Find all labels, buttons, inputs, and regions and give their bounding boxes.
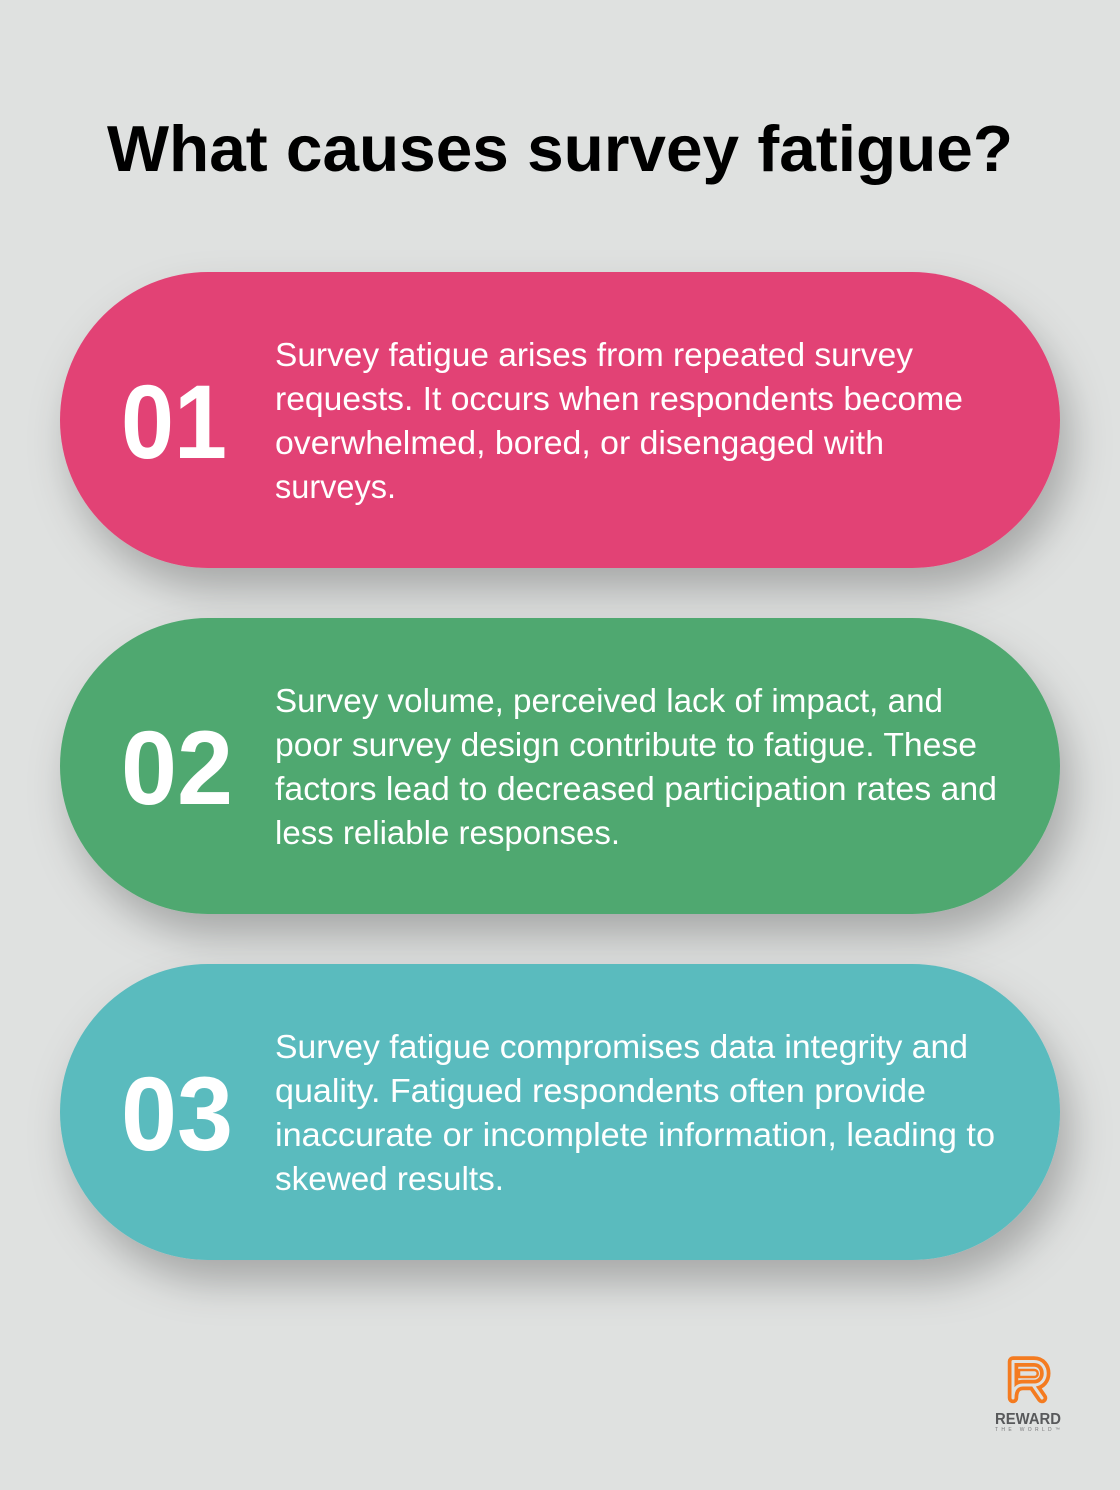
panel: card 03	[60, 964, 1060, 1260]
card 03 text: Survey fatigue compromises data integrity and	[275, 1028, 968, 1065]
card 03 text: inaccurate or incomplete information, leading to	[275, 1116, 995, 1153]
card 03 background	[60, 964, 1060, 1260]
card 03 text: quality. Fatigued respondents often provide	[275, 1072, 926, 1109]
card 02 number: 02	[121, 710, 233, 827]
card 02 text: factors lead to decreased participation rates and	[275, 770, 997, 807]
panel: card 02	[60, 618, 1060, 914]
card 02 text: less reliable responses.	[275, 814, 620, 851]
title: What causes survey fatigue?	[107, 112, 1013, 185]
card 03 number: 03	[121, 1056, 233, 1173]
icon: orange R mark	[1013, 1362, 1045, 1398]
card 02 background	[60, 618, 1060, 914]
logo wordmark: REWARD	[995, 1411, 1061, 1428]
card 02 text	[275, 682, 997, 851]
card 01 text: surveys.	[275, 468, 396, 505]
panel: card 01	[60, 272, 1060, 568]
card 01 text	[275, 336, 963, 505]
card 03 text	[275, 1028, 995, 1197]
card 01 text: requests. It occurs when respondents become	[275, 380, 963, 417]
card 01 text: Survey fatigue arises from repeated survey	[275, 336, 913, 373]
card 01 background	[60, 272, 1060, 568]
card 01 number: 01	[121, 364, 227, 481]
logo tagline: THE WORLD™	[995, 1427, 1060, 1433]
card 01 text: overwhelmed, bored, or disengaged with	[275, 424, 884, 461]
logo: Reward the World	[995, 1362, 1061, 1433]
card 02 text: poor survey design contribute to fatigue. These	[275, 726, 977, 763]
card 03 text: skewed results.	[275, 1160, 504, 1197]
card 02 text: Survey volume, perceived lack of impact, and	[275, 682, 943, 719]
